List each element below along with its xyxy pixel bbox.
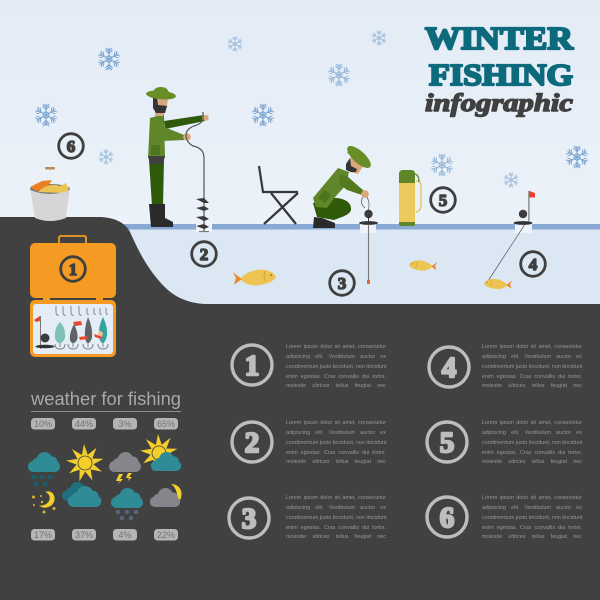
weather percent pills top: 44% [75, 419, 93, 429]
dark ground and lower panel [0, 217, 600, 600]
folding chair [259, 166, 298, 224]
text block 3: adipiscing elit. Vestibulum auctor ex [286, 505, 386, 511]
icon: thunder cloud [109, 452, 141, 485]
hat [344, 143, 374, 171]
large list digits: 1 [245, 350, 259, 382]
scene number digits: 3 [338, 274, 346, 293]
large list digits: 4 [442, 352, 456, 384]
text block 2: molestie ultrices tellus feugiat nec [286, 459, 386, 465]
water under ice [100, 229, 600, 305]
mini tip-up [40, 316, 41, 349]
text block 5: condimentum justo tincidunt, non tincidunt [482, 440, 582, 446]
scene number digits: 1 [69, 260, 77, 279]
text block 4: Lorem ipsum dolor sit amet, consectetur [482, 344, 582, 350]
front arm [151, 124, 184, 141]
fish [233, 260, 512, 289]
text block 6: adipiscing elit. Vestibulum auctor ex [482, 505, 582, 511]
large list digits: 2 [245, 427, 259, 459]
beard [346, 158, 357, 172]
float [364, 210, 373, 218]
text block 4: molestie ultrices tellus feugiat nec [482, 383, 582, 389]
text block 2: enim egestas. Cras convallis dui tortor, [286, 450, 386, 456]
torso [313, 168, 349, 208]
icon: moon and stars [32, 492, 56, 514]
text block 2: condimentum justo tincidunt, non tincidunt [286, 440, 386, 446]
text block 4: adipiscing elit. Vestibulum auctor ex [482, 354, 582, 360]
text block 3: molestie ultrices tellus feugiat nec [286, 534, 386, 540]
text block 6: Lorem ipsum dolor sit amet, consectetur [482, 495, 582, 501]
pocket [318, 190, 331, 203]
boots [149, 204, 173, 227]
icon: snow cloud [111, 488, 143, 520]
neck and face [155, 97, 168, 116]
text block 5: molestie ultrices tellus feugiat nec [482, 459, 582, 465]
text block 5 [482, 420, 582, 465]
crouching fisherman with rod [313, 143, 378, 284]
text block 5: Lorem ipsum dolor sit amet, consectetur [482, 420, 582, 426]
text block 4: enim egestas. Cras convallis dui tortor, [482, 374, 582, 380]
text block 6: molestie ultrices tellus feugiat nec [482, 534, 582, 540]
scene number digits: 2 [200, 245, 208, 264]
title: FISHING [429, 57, 573, 92]
text block 3 [286, 495, 386, 540]
thermos [399, 170, 421, 226]
weather percent pills top: 10% [34, 419, 52, 429]
scene number digits: 6 [67, 137, 75, 156]
weather percent pills top [31, 418, 178, 430]
auger [186, 112, 204, 232]
weather percent pills bottom: 4% [118, 530, 132, 540]
weather percent pills bottom: 17% [34, 530, 52, 540]
text block 6 [482, 495, 582, 540]
text block 3: condimentum justo tincidunt, non tincidunt [286, 515, 386, 521]
weather percent pills top: 3% [118, 419, 132, 429]
tackle box [30, 236, 116, 357]
large list digits: 3 [242, 503, 256, 535]
title [425, 20, 574, 117]
weather percent pills bottom [31, 529, 178, 540]
text block 1: molestie ultrices tellus feugiat nec [286, 383, 386, 389]
text block 2 [286, 420, 386, 465]
text block 6: enim egestas. Cras convallis dui tortor, [482, 525, 582, 531]
torso [148, 114, 165, 158]
icon: sun behind cloud [140, 434, 181, 472]
hand [361, 190, 369, 198]
text block 2: adipiscing elit. Vestibulum auctor ex [286, 430, 386, 436]
title: infographic [425, 90, 573, 117]
weather heading: weather for fishing [30, 388, 181, 409]
weather percent pills bottom: 22% [157, 530, 175, 540]
text block 3: Lorem ipsum dolor sit amet, consectetur [286, 495, 386, 501]
head [346, 157, 364, 174]
large list digits: 5 [440, 427, 454, 459]
text block 1: Lorem ipsum dolor sit amet, consectetur [286, 344, 386, 350]
standing fisherman with ice auger [146, 87, 209, 232]
hooks [55, 306, 108, 349]
tip-up with flag [488, 191, 535, 281]
text block 1: condimentum justo tincidunt, non tincidunt [286, 364, 386, 370]
text block 6: condimentum justo tincidunt, non tincidunt [482, 515, 582, 521]
large list digits: 6 [440, 502, 454, 534]
scene number digits: 4 [529, 255, 538, 274]
icon: sun [66, 444, 104, 482]
background: winter sky [0, 0, 600, 226]
snowflakes [35, 31, 588, 187]
text block 5: enim egestas. Cras convallis dui tortor, [482, 450, 582, 456]
arm [339, 175, 364, 195]
weather percent pills bottom: 37% [75, 530, 93, 540]
rear arm [164, 115, 205, 129]
scene number markers [59, 134, 545, 295]
text block 1: adipiscing elit. Vestibulum auctor ex [286, 354, 386, 360]
text block 1 [286, 344, 386, 389]
text block 4 [482, 344, 582, 389]
text block 4: condimentum justo tincidunt, non tincidunt [482, 364, 582, 370]
ice surface with holes [120, 224, 600, 233]
legs [313, 198, 351, 220]
hands [183, 133, 191, 141]
text block 1: enim egestas. Cras convallis dui tortor, [286, 374, 386, 380]
icon: double cloud [62, 482, 101, 507]
bucket of fish [30, 167, 70, 221]
scene number digits [67, 137, 538, 293]
weather percent pills top: 65% [157, 419, 175, 429]
boot [313, 217, 335, 228]
text block 5: adipiscing elit. Vestibulum auctor ex [482, 430, 582, 436]
large list digits [242, 350, 456, 535]
rod loop [361, 197, 369, 210]
title: WINTER [425, 20, 574, 56]
belt [148, 156, 165, 164]
large list number rings [229, 345, 469, 538]
hair and beard [153, 98, 167, 113]
icon: rain cloud [28, 452, 60, 486]
text block 2: Lorem ipsum dolor sit amet, consectetur [286, 420, 386, 426]
hat [146, 87, 176, 101]
scene number digits: 5 [439, 191, 447, 210]
text block 3: enim egestas. Cras convallis dui tortor, [286, 525, 386, 531]
pocket [151, 145, 160, 155]
legs [149, 160, 164, 206]
fishing line [368, 225, 370, 280]
lures [55, 322, 65, 343]
icon: cloud with moon [150, 484, 182, 507]
